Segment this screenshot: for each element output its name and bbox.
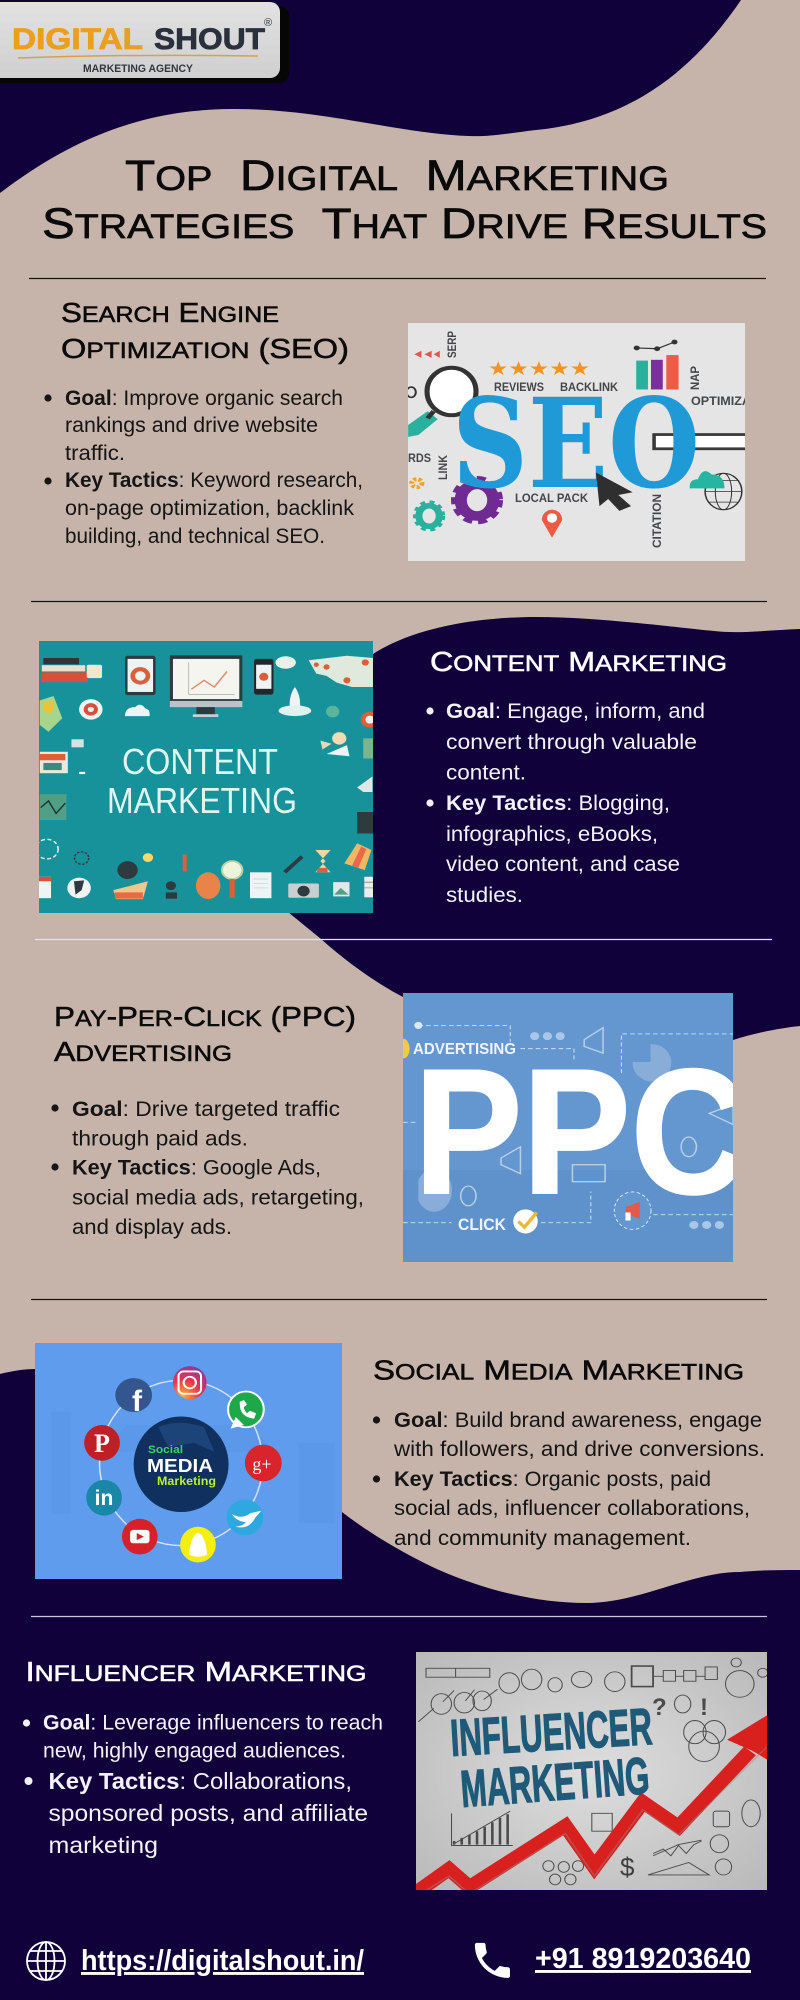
heading: SEO [61,297,349,364]
footer: website [27,1942,364,1980]
image: SEO collage: BACKLINK [560,380,618,394]
heading: PPC: ADVERTISING [54,1036,232,1067]
panel: pay-per-click advertising [51,993,748,1262]
image: influencer marketing chalk graph: MARKETING [459,1747,651,1819]
heading: influencer marketing: INFLUENCER MARKETING [26,1656,366,1687]
panel: social media marketing [35,1343,765,1579]
image: social media ring: f [132,1385,143,1418]
logo: Digital Shout: SHOUT [154,23,265,56]
heading: social media marketing: SOCIAL MEDIA MARKETING [373,1354,744,1386]
panel: search engine optimization [44,297,751,561]
bullets: SEO: building, and technical SEO. [65,525,325,548]
bullets: influencer marketing: Goal: Leverage influencers to reach [43,1712,383,1734]
image: influencer marketing chalk graph: INFLUENCER [449,1698,654,1768]
bullets: content marketing: Goal: Engage, inform, and [446,700,705,723]
image: influencer marketing chalk graph: $ [620,1852,635,1882]
image: SEO collage: NAP [688,366,702,390]
title: TOP DIGITAL M ARKETING [125,152,669,200]
bullets: content marketing: studies. [446,884,523,907]
bullets: social media: social ads, influencer collaborations, [394,1497,750,1520]
bullets: SEO [44,387,363,548]
bullets: PPC: Key Tactics: Google Ads, [72,1156,321,1180]
bullets: influencer marketing: Key Tactics: Collaborations, [48,1768,352,1794]
footer: phone [475,1943,751,1978]
bullets: SEO: Goal: Improve organic search [65,387,343,410]
image: social media ring: P [94,1429,110,1458]
title [42,152,767,248]
logo: Digital Shout: ® [264,17,272,29]
image: SEO collage: ★★★★★ [488,358,590,380]
image: social media ring [35,1343,342,1579]
image: SEO collage: LOCAL PACK [515,491,588,505]
top navy wave [0,0,741,193]
image: social media ring: Social [148,1444,183,1456]
image: content marketing collage: CONTENT [122,741,278,782]
image: social media ring: in [95,1487,113,1510]
bullets: social media: with followers, and drive conversions. [393,1438,765,1461]
bullets: SEO: Key Tactics: Keyword research, [65,469,363,492]
panel: influencer marketing [23,1652,768,1897]
image: SEO collage: OPTIMIZA [691,394,751,408]
image: social media ring: g+ [252,1454,272,1474]
bullets: content marketing: infographics, eBooks, [446,823,658,846]
image: influencer marketing chalk graph: ! [700,1694,708,1721]
bullets: content marketing: video content, and case [446,853,680,876]
image: SEO collage: LINK [436,455,450,480]
image: SEO collage [407,323,751,561]
image: content marketing collage: MARKETING [107,780,297,821]
bottom navy wave [0,1369,800,2000]
image: social media ring: Marketing [157,1474,216,1488]
bullets: influencer marketing: marketing [48,1832,158,1858]
image: SEO collage: SERP [445,331,459,358]
heading: content marketing: CONTENT MARKETING [430,646,727,677]
icon: globe [27,1942,65,1980]
image: PPC graphic: ADVERTISING [413,1041,516,1058]
image: influencer marketing chalk graph [416,1652,768,1897]
bullets: social media: and community management. [394,1527,691,1550]
bullets: influencer marketing: sponsored posts, and affiliate [48,1800,368,1826]
image: social media ring: MEDIA [147,1456,213,1476]
logo: Digital Shout: MARKETING AGENCY [83,63,194,75]
bullets: PPC: Goal: Drive targeted traffic [72,1098,340,1121]
link: website: https://digitalshout.in/ [81,1945,364,1977]
link: phone number: +91 8919203640 [535,1943,751,1975]
bullets: influencer marketing: new, highly engaged audiences. [43,1740,346,1762]
heading: PPC: PAY-PER-CLICK (PPC) [54,1001,356,1032]
logo: Digital Shout: DIGITAL [12,23,143,56]
bullets: influencer marketing [23,1712,383,1858]
heading: SEO: OPTIMIZATION (SEO) [61,333,349,364]
heading: PPC [54,1001,356,1067]
icon: phone [475,1943,510,1978]
bullets: SEO: on-page optimization, backlink [65,497,355,520]
image: SEO collage: RDS [408,451,431,465]
logo: Digital Shout [0,2,289,83]
bullets: PPC: and display ads. [72,1216,232,1239]
bullets: content marketing [426,700,705,907]
bullets: SEO: rankings and drive website [65,414,318,437]
middle navy wave [200,617,800,1040]
image: PPC graphic: PPC [414,1032,748,1231]
image: PPC graphic: CLICK [458,1215,507,1234]
image: content marketing collage [36,641,379,913]
bullets: SEO: traffic. [65,442,125,465]
image: PPC graphic [396,993,748,1262]
bullets: social media: Goal: Build brand awareness, engage [394,1409,762,1432]
bullets: PPC: through paid ads. [72,1128,248,1150]
heading: SEO: SEARCH ENGINE [61,297,279,328]
bullets: social media [373,1409,765,1550]
image: influencer marketing chalk graph: ? [652,1694,667,1721]
bullets: social media: Key Tactics: Organic posts, paid [394,1468,711,1491]
bullets: PPC [51,1098,364,1239]
image: SEO collage: REVIEWS [494,380,544,394]
image: SEO collage: CITATION [650,494,664,548]
panel: content marketing [36,641,727,913]
title: STRATEGIES THAT DRIVE RESULTS [42,200,767,248]
bullets: content marketing: convert through valuable [446,731,697,754]
bullets: PPC: social media ads, retargeting, [72,1186,364,1210]
bullets: content marketing: Key Tactics: Blogging, [446,792,670,815]
bullets: content marketing: content. [446,762,526,784]
